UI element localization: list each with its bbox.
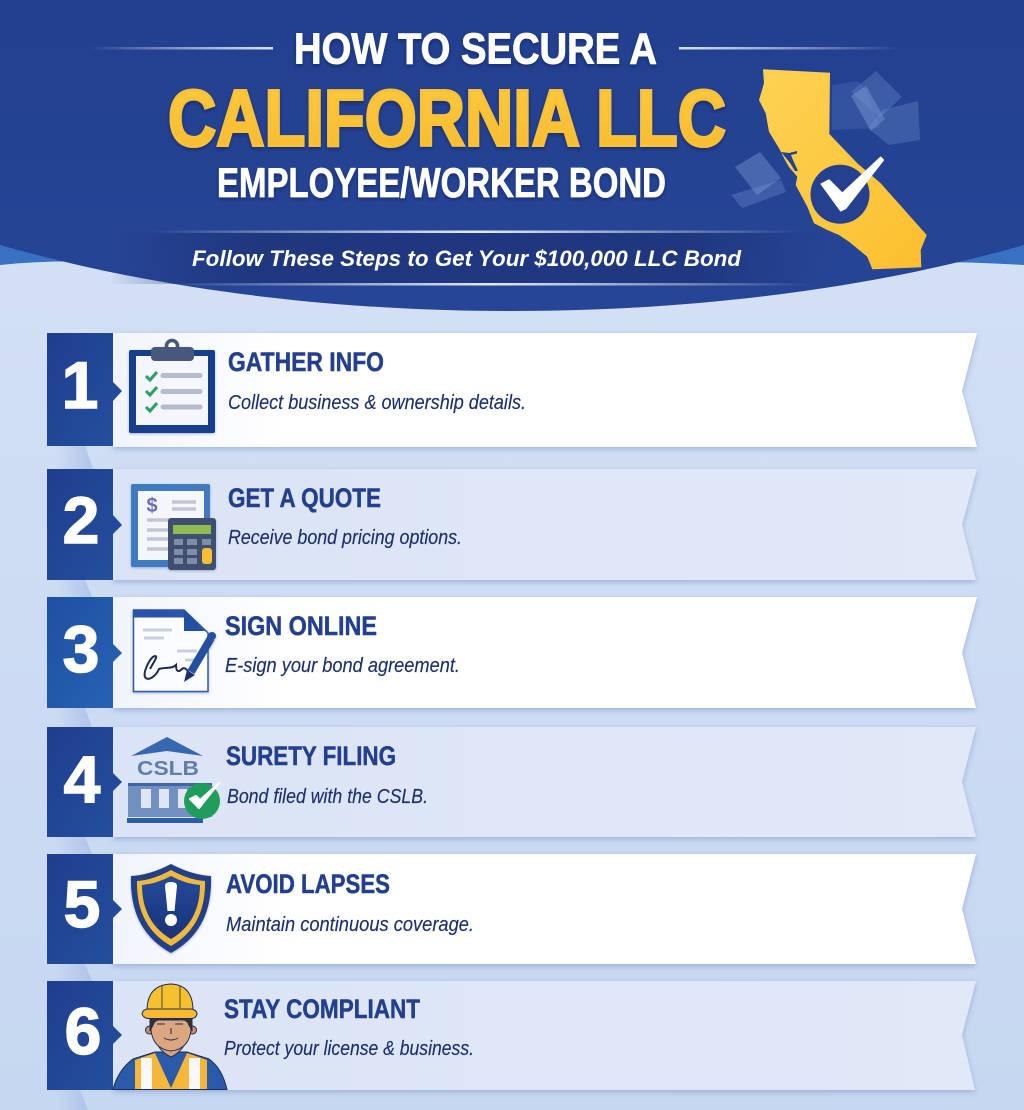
number 1: 1 (62, 348, 98, 422)
description: get a quote: Receive bond pricing options. (228, 527, 462, 549)
number 3: 3 (63, 612, 99, 686)
subtitle ribbon (110, 230, 830, 286)
heading: get a quote: GET A QUOTE (228, 483, 381, 513)
number badge 3 (47, 597, 122, 708)
description: gather info: Collect business & ownership details. (228, 392, 526, 414)
icon: signed document with pen (133, 610, 216, 692)
panel: step 6 stay compliant (47, 981, 976, 1090)
number badge 2 (47, 469, 122, 580)
icon: construction worker (113, 984, 227, 1090)
heading: stay compliant: STAY COMPLIANT (224, 994, 420, 1024)
decorative header rule left (90, 47, 273, 50)
decorative ribbon shadows (55, 446, 93, 1110)
panel: step 3 sign online (47, 597, 977, 708)
icon: invoice and calculator: $ (146, 495, 158, 517)
icon: invoice and calculator (131, 484, 216, 570)
number badge 6 (47, 981, 122, 1090)
heading: sign online: SIGN ONLINE (225, 611, 377, 641)
description: surety filing: Bond filed with the CSLB. (227, 786, 428, 808)
number 2: 2 (63, 483, 99, 557)
icon: CSLB building with check badge: CSLB (137, 758, 199, 780)
number 6: 6 (65, 994, 101, 1068)
description: avoid lapses: Maintain continuous coverage. (226, 914, 474, 936)
number 4: 4 (64, 742, 101, 816)
title: CALIFORNIA LLC (168, 74, 726, 162)
title: HOW TO SECURE A (294, 24, 657, 74)
panel: step 2 get a quote (47, 469, 977, 580)
panel: step 1 gather info (47, 333, 977, 447)
decorative header rule right (679, 47, 899, 50)
heading: avoid lapses: AVOID LAPSES (226, 869, 390, 899)
panel: step 4 surety filing (47, 727, 976, 837)
description: stay compliant: Protect your license & business. (224, 1038, 474, 1060)
icon: clipboard checklist (129, 340, 215, 433)
header banner (0, 0, 1024, 311)
number badge 4 (47, 727, 122, 837)
number badge 5 (47, 854, 122, 964)
number badge 1 (47, 333, 122, 446)
icon: California map with check mark (731, 69, 927, 269)
heading: gather info: GATHER INFO (228, 347, 384, 377)
icon: CSLB building with check badge (127, 737, 220, 823)
heading: surety filing: SURETY FILING (226, 741, 396, 771)
description: sign online: E-sign your bond agreement. (225, 655, 460, 677)
panel: step 5 avoid lapses (47, 854, 976, 964)
title (168, 24, 726, 206)
number 5: 5 (64, 867, 100, 941)
subtitle ribbon: Follow These Steps to Get Your $100,000 LLC Bond (192, 246, 742, 271)
title: EMPLOYEE/WORKER BOND (217, 159, 666, 206)
icon: warning shield (131, 864, 211, 953)
